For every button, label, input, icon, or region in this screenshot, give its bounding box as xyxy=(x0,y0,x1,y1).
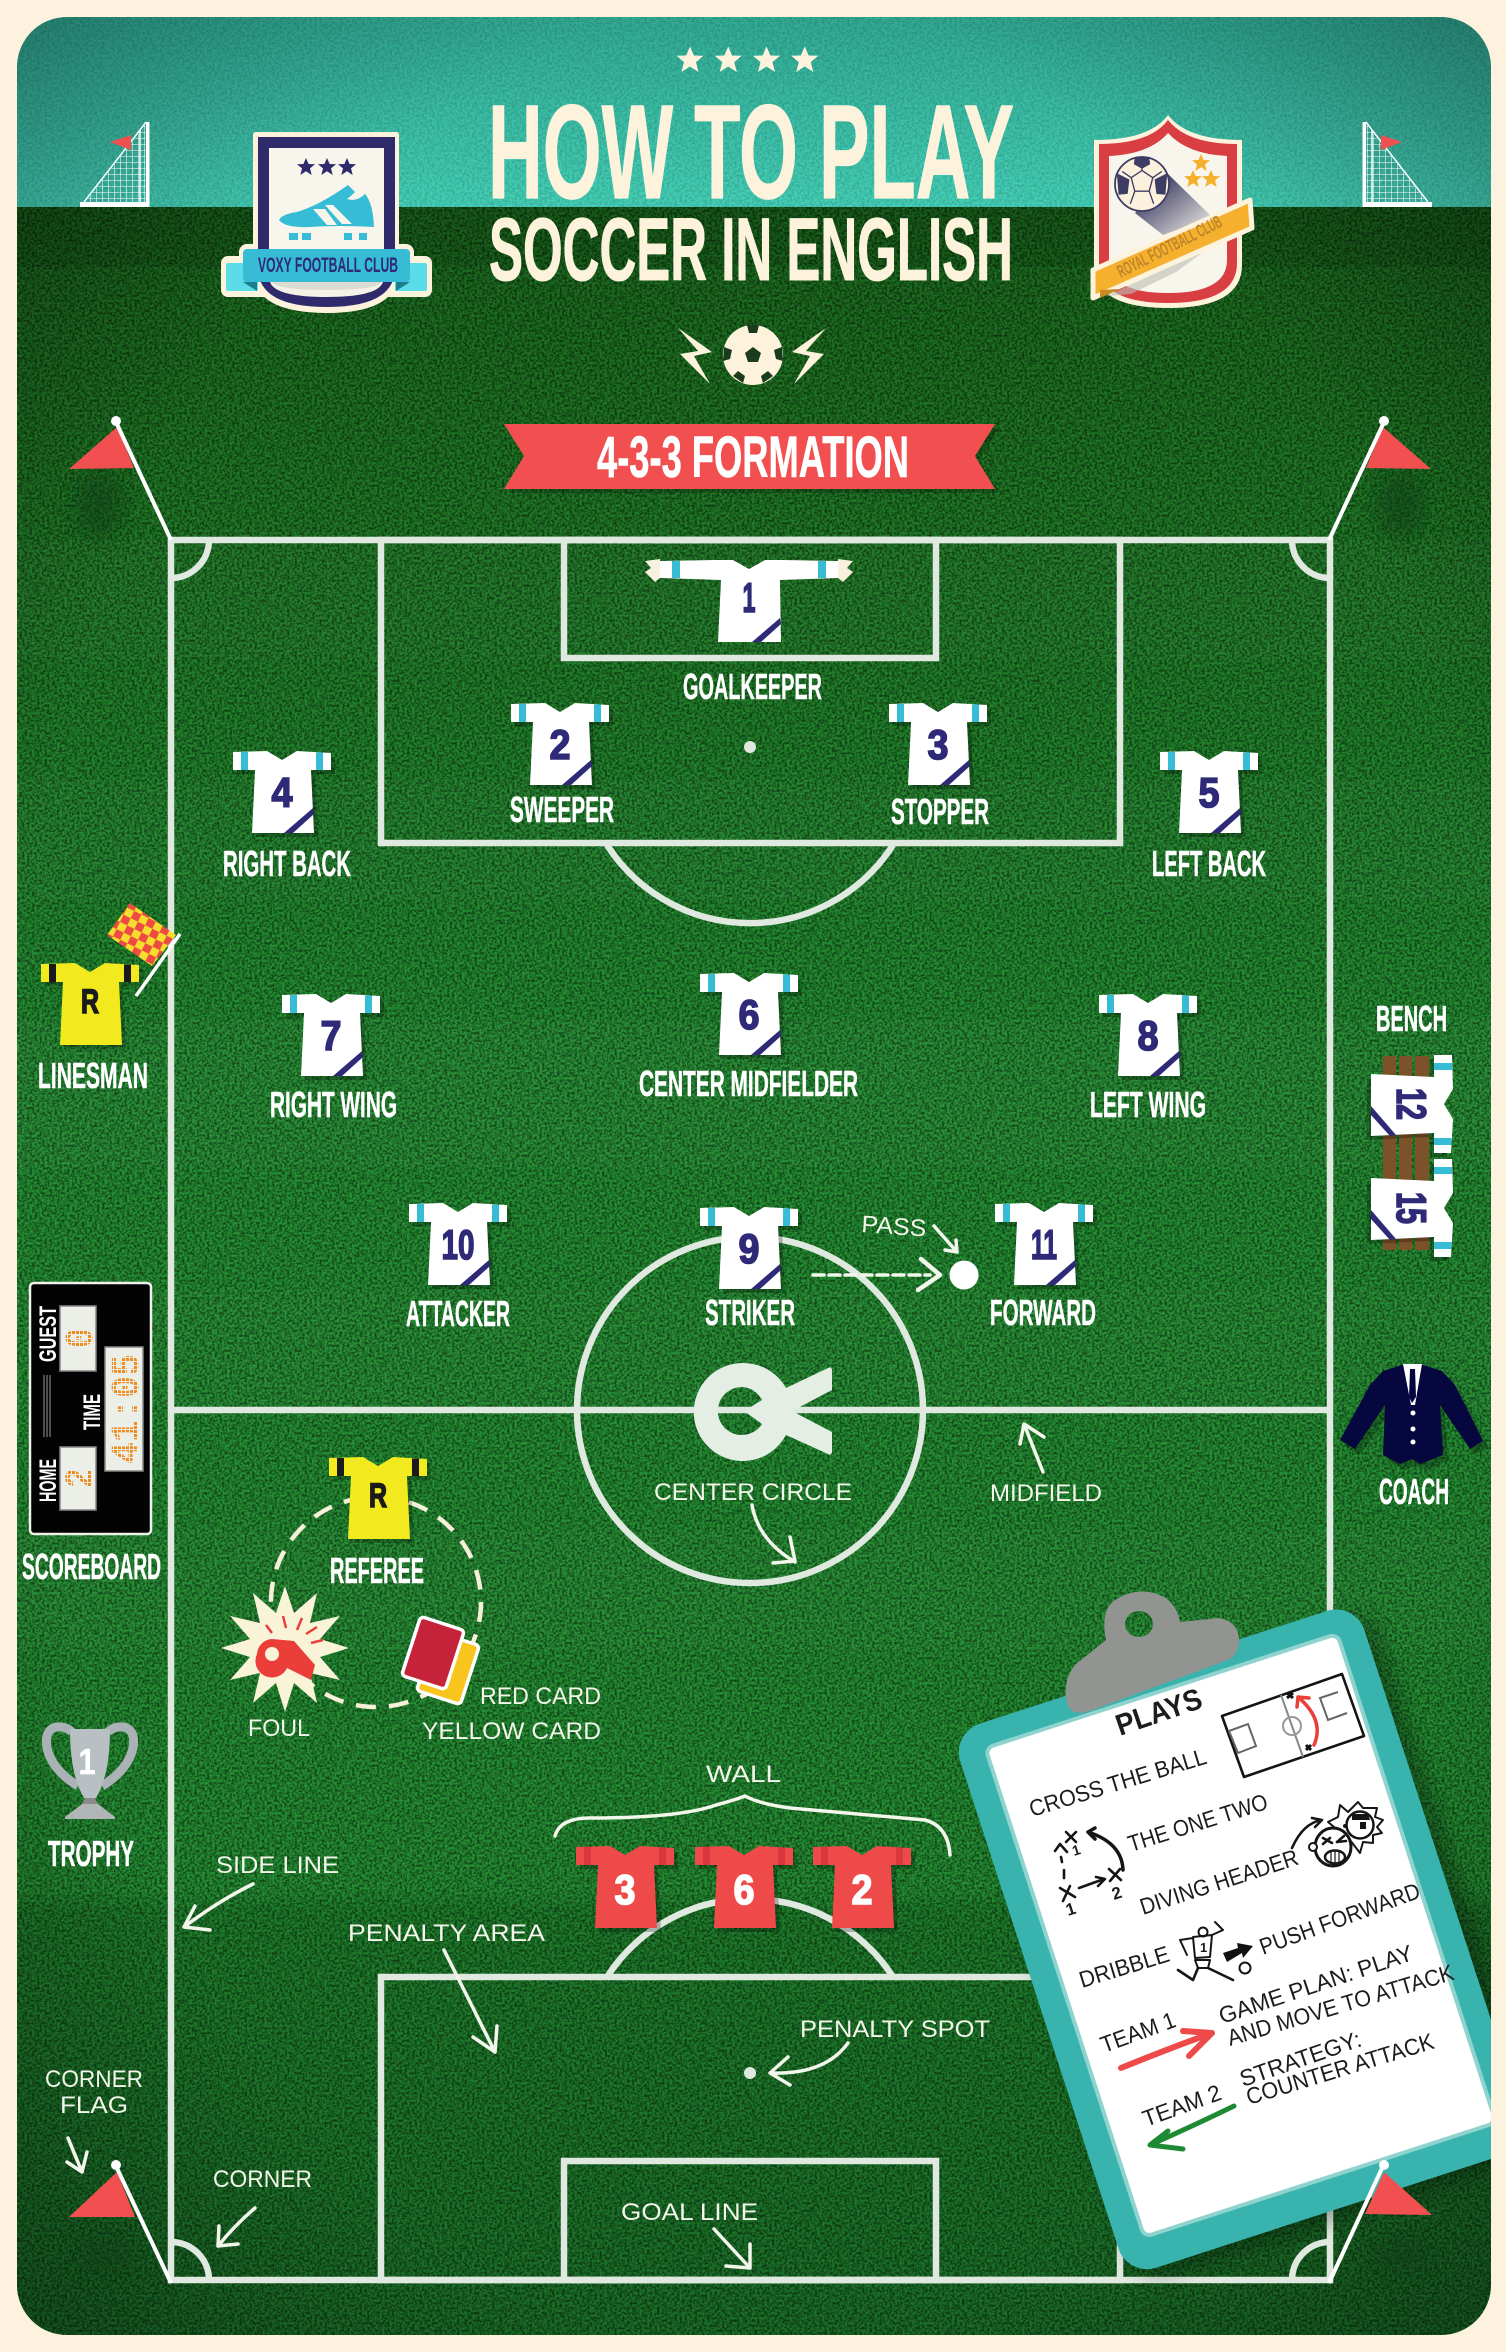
arrow: side line xyxy=(184,1884,253,1930)
player 10 xyxy=(409,1203,511,1289)
corner flag: bottom right xyxy=(1329,2160,1432,2283)
label: left back: LEFT BACK xyxy=(1152,843,1266,884)
label: referee: REFEREE xyxy=(330,1550,424,1591)
bench: 12 xyxy=(1388,1088,1435,1120)
corner flag: top right xyxy=(1329,416,1431,540)
label: midfield: MIDFIELD xyxy=(990,1480,1102,1507)
label: corner flag: CORNER xyxy=(45,2066,143,2093)
label: attacker: ATTACKER xyxy=(406,1293,510,1334)
clipboard clip xyxy=(1066,1591,1239,1713)
player 5: 5 xyxy=(1198,769,1220,816)
arrow: goal line xyxy=(714,2229,750,2268)
sketch: red arrow xyxy=(1121,2031,1212,2068)
sketch: dribbling player xyxy=(1178,1922,1250,1980)
sketch: one two diagram xyxy=(1055,1828,1124,1920)
title xyxy=(488,78,1014,299)
wall shirt 6: 6 xyxy=(734,1866,754,1913)
icon: Voxy Football Club crest: VOXY FOOTBALL CLUB xyxy=(258,254,398,277)
wall shirt 3: 3 xyxy=(614,1866,636,1913)
label: yellow card: YELLOW CARD xyxy=(422,1718,601,1745)
player 11: 11 xyxy=(1031,1221,1057,1268)
sketch: one two diagram: 1 xyxy=(1063,1899,1078,1920)
player 3: 3 xyxy=(928,721,948,768)
bench: 15 xyxy=(1388,1192,1435,1224)
arrow: penalty spot xyxy=(770,2043,848,2085)
arrow: corner flag xyxy=(67,2138,87,2172)
wall shirt 2: 2 xyxy=(852,1866,872,1913)
text: and move to attack: AND MOVE TO ATTACK xyxy=(1224,1959,1457,2051)
sketch: black arrow xyxy=(1223,1943,1253,1962)
referee xyxy=(329,1457,431,1543)
wall shirt 6 xyxy=(695,1846,797,1932)
player 4: 4 xyxy=(272,769,293,816)
scoreboard: 0 xyxy=(60,1328,105,1348)
scoreboard: 41:05 xyxy=(106,1354,151,1464)
icon: Royal Football Club crest xyxy=(1093,115,1252,308)
scoreboard: 2 xyxy=(60,1468,105,1488)
label: goal line: GOAL LINE xyxy=(621,2199,758,2226)
scoreboard xyxy=(30,1283,151,1534)
goalkeeper xyxy=(645,559,853,642)
dashed referee circle xyxy=(271,1497,481,1707)
label: corner flag: FLAG xyxy=(60,2092,128,2119)
label: center circle: CENTER CIRCLE xyxy=(654,1479,852,1506)
linesman xyxy=(41,903,180,1049)
arrow: midfield xyxy=(1020,1424,1044,1472)
text: cross the ball: CROSS THE BALL xyxy=(1026,1743,1210,1822)
label: stopper: STOPPER xyxy=(891,791,989,832)
player 7: 7 xyxy=(320,1012,342,1059)
text: strategy: STRATEGY: xyxy=(1236,2026,1365,2092)
label: corner flag xyxy=(45,2066,143,2119)
bench xyxy=(1367,1055,1453,1261)
arrow: penalty area xyxy=(444,1950,497,2052)
icon: Voxy Football Club crest xyxy=(221,132,432,313)
corner flag: bottom left xyxy=(69,2160,171,2283)
icon: foul whistle xyxy=(221,1586,349,1712)
player 4 xyxy=(233,751,335,837)
wall shirt 2 xyxy=(813,1846,915,1932)
player 10: 10 xyxy=(442,1221,474,1268)
label: striker: STRIKER xyxy=(705,1292,795,1333)
label: right back: RIGHT BACK xyxy=(223,843,351,884)
arrow: pass xyxy=(813,1226,957,1290)
label: center midfielder: CENTER MIDFIELDER xyxy=(639,1063,858,1104)
sketch: one two diagram: 2 xyxy=(1109,1883,1124,1904)
label: pass: PASS xyxy=(861,1211,927,1243)
center spot xyxy=(744,741,756,753)
text: counter attack: COUNTER ATTACK xyxy=(1243,2028,1438,2110)
banner: 4-3-3 formation xyxy=(504,424,999,493)
linesman: R xyxy=(81,983,99,1021)
text: dribble: DRIBBLE xyxy=(1076,1941,1172,1993)
player 9 xyxy=(700,1207,802,1293)
label: red card: RED CARD xyxy=(480,1683,601,1710)
text: diving header: DIVING HEADER xyxy=(1137,1844,1301,1920)
text: team 2: TEAM 2 xyxy=(1139,2079,1225,2132)
player 2: 2 xyxy=(550,721,570,768)
sketch: one two diagram: 1 xyxy=(1070,1841,1083,1859)
field markings xyxy=(171,540,1330,2280)
label: right wing: RIGHT WING xyxy=(270,1084,397,1125)
label: goalkeeper: GOALKEEPER xyxy=(683,666,822,707)
label: penalty area: PENALTY AREA xyxy=(348,1920,545,1947)
label: scoreboard: SCOREBOARD xyxy=(22,1546,161,1587)
text: the one two: THE ONE TWO xyxy=(1125,1788,1271,1857)
player 6 xyxy=(700,973,802,1059)
label: penalty spot: PENALTY SPOT xyxy=(800,2016,990,2043)
player 5 xyxy=(1160,751,1262,837)
label: side line: SIDE LINE xyxy=(216,1852,339,1879)
icon: red and yellow cards xyxy=(402,1616,479,1705)
stars xyxy=(676,46,818,72)
player 8 xyxy=(1099,994,1201,1080)
label: sweeper: SWEEPER xyxy=(510,789,614,830)
wall brace xyxy=(555,1796,950,1855)
sketch: dribbling player: 1 xyxy=(1200,1940,1207,1955)
label: trophy: TROPHY xyxy=(48,1833,134,1874)
coach jacket xyxy=(1340,1364,1488,1470)
player 2 xyxy=(511,703,613,789)
player 8: 8 xyxy=(1138,1012,1158,1059)
corner flag: top left xyxy=(69,416,171,540)
sketch: header xyxy=(1292,1802,1383,1866)
icon: ball with lightning bolts xyxy=(678,325,826,385)
title: SOCCER IN ENGLISH xyxy=(489,199,1013,299)
penalty spot xyxy=(744,2067,756,2079)
label: forward: FORWARD xyxy=(990,1292,1096,1333)
banner: 4-3-3 formation: 4-3-3 FORMATION xyxy=(597,425,909,490)
label: wall: WALL xyxy=(706,1761,781,1788)
trophy xyxy=(46,1727,134,1819)
scoreboard: HOME xyxy=(35,1459,62,1502)
center logo xyxy=(694,1363,832,1461)
label: corner: CORNER xyxy=(213,2166,312,2193)
player 11 xyxy=(995,1203,1097,1289)
sketch: green arrow xyxy=(1150,2106,1234,2149)
player 3 xyxy=(889,703,991,789)
player 7 xyxy=(282,994,384,1080)
mini pitch sketch xyxy=(1222,1674,1364,1777)
trophy: 1 xyxy=(78,1741,96,1782)
label: left wing: LEFT WING xyxy=(1090,1084,1206,1125)
text: push forward: PUSH FORWARD xyxy=(1256,1877,1424,1960)
text: game plan: GAME PLAN: PLAY xyxy=(1215,1940,1416,2029)
scoreboard: TIME xyxy=(79,1394,106,1430)
text: team 1: TEAM 1 xyxy=(1097,2007,1179,2058)
wall shirt 3 xyxy=(576,1846,678,1932)
ball on pitch xyxy=(950,1260,978,1290)
icon: left goal xyxy=(80,122,150,207)
label: foul: FOUL xyxy=(248,1715,310,1742)
clipboard heading: plays: PLAYS xyxy=(1112,1682,1206,1743)
player 9: 9 xyxy=(738,1225,760,1272)
arrow: center circle xyxy=(752,1505,795,1563)
label: linesman: LINESMAN xyxy=(38,1055,148,1096)
player 6: 6 xyxy=(738,991,760,1038)
goalkeeper: 1 xyxy=(742,574,756,621)
label: bench: BENCH xyxy=(1376,998,1447,1039)
referee: R xyxy=(369,1477,387,1515)
icon: Royal Football Club crest: ROYAL FOOTBALL CLUB xyxy=(1114,212,1225,282)
clipboard panel xyxy=(951,1591,1506,2287)
title: HOW TO PLAY xyxy=(488,78,1014,227)
scoreboard: GUEST xyxy=(35,1306,62,1362)
arrow: corner xyxy=(218,2208,255,2246)
icon: right goal xyxy=(1362,122,1432,207)
